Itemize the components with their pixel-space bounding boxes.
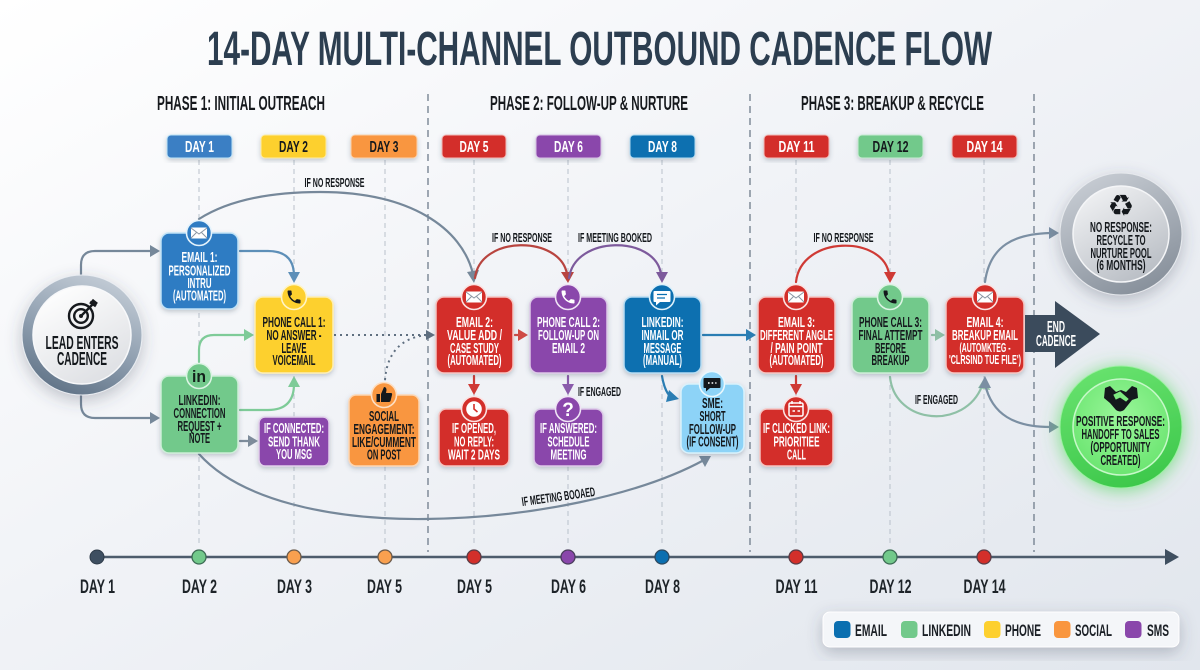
panel: email 2: EMAIL 2: bbox=[456, 315, 493, 331]
icon: phone bbox=[878, 284, 902, 310]
arrow: email 2 to phone call 2 bbox=[515, 329, 528, 341]
panel: email 1: (AUTOMATED) bbox=[173, 288, 226, 304]
arrow: red arc email 2 to phone call 2 bbox=[475, 245, 574, 283]
panel: linkedin inmail: (MANUAL) bbox=[643, 353, 682, 369]
panel: social engagement bbox=[349, 382, 419, 466]
panel: if connected: IF CONNECTED: bbox=[264, 421, 324, 437]
panel: email 4: EMAIL 4: bbox=[966, 315, 1004, 331]
timeline marker: day 8 bbox=[645, 550, 680, 598]
day badge: day 8 bbox=[630, 135, 695, 158]
arrow: purple arc phone call 2 to linkedin bbox=[569, 245, 668, 283]
timeline marker: day 3: DAY 3 bbox=[277, 577, 312, 598]
panel: email 4: BREAKUP EMAIL bbox=[952, 328, 1018, 344]
panel: email 2: (AUTOMATED) bbox=[448, 353, 502, 369]
arrow: social engagement dotted bbox=[385, 335, 428, 380]
panel: phone call 2 bbox=[530, 284, 607, 373]
arrow: red arc email 3 to phone call 3 bbox=[796, 246, 896, 283]
panel: if answered: IF ANSWERED: bbox=[540, 421, 597, 437]
panel: email 3: EMAIL 3: bbox=[778, 315, 815, 331]
panel: email 3 bbox=[758, 284, 835, 373]
panel: linkedin inmail: MESSAGE bbox=[644, 341, 682, 357]
panel: if clicked link bbox=[760, 396, 833, 466]
panel: linkedin connection bbox=[161, 364, 238, 453]
timeline marker: day 6: DAY 6 bbox=[551, 577, 586, 598]
panel: social engagement: ENGAGEMENT: bbox=[354, 422, 414, 438]
lead enters cadence circle: CADENCE bbox=[57, 348, 107, 369]
panel: if answered: SCHEDULE bbox=[548, 434, 590, 450]
timeline marker: day 11: DAY 11 bbox=[776, 577, 818, 598]
panel: if connected: YOU MSG bbox=[276, 447, 312, 463]
circle: no response recycle: NO RESPONSE: bbox=[1090, 220, 1152, 236]
day badge: day 1: DAY 1 bbox=[185, 139, 214, 156]
panel: if clicked link: CALL bbox=[787, 448, 806, 464]
icon: clock bbox=[462, 396, 486, 422]
panel: if opened: WAIT 2 DAYS bbox=[448, 448, 500, 464]
panel: linkedin connection: CONNECTION bbox=[174, 406, 226, 422]
timeline marker: day 5: DAY 5 bbox=[367, 577, 402, 598]
arrow: green arc phone call 3 to email 4 bbox=[890, 377, 990, 416]
panel: email 2: VALUE ADD / bbox=[447, 328, 502, 344]
panel: phone call 1: LEAVE bbox=[282, 341, 307, 357]
arrow: phone call 2 down bbox=[562, 376, 574, 395]
legend item: social: SOCIAL bbox=[1075, 621, 1112, 640]
icon: linkedin: in bbox=[192, 367, 206, 386]
arrow: end cadence bbox=[1025, 301, 1100, 368]
panel: linkedin connection: NOTE bbox=[189, 431, 210, 447]
arrow: email 2 down bbox=[468, 376, 480, 395]
arrow: linkedin to email 3 bbox=[703, 329, 756, 341]
panel: email 4: (AUTOMKTEG - bbox=[960, 341, 1010, 355]
legend bbox=[823, 612, 1179, 647]
legend item: email: EMAIL bbox=[855, 621, 887, 640]
icon: phone bbox=[556, 284, 580, 310]
panel: phone call 2: PHONE CALL 2: bbox=[537, 315, 600, 331]
timeline marker: day 1: DAY 1 bbox=[80, 577, 115, 598]
panel: sms follow-up: SME: bbox=[702, 396, 723, 412]
day badge: day 2: DAY 2 bbox=[279, 139, 308, 156]
panel: phone call 1: PHONE CALL 1: bbox=[262, 315, 326, 331]
panel: social engagement: LIKE/CUMMENT bbox=[352, 435, 416, 451]
panel: phone call 3: PHONE CALL 3: bbox=[859, 315, 922, 331]
panel: if answered: MEETING bbox=[550, 448, 586, 464]
panel: sms follow-up: FOLLOW-UP bbox=[689, 422, 736, 438]
panel: if connected bbox=[259, 417, 329, 466]
timeline marker: day 3 bbox=[277, 550, 312, 598]
arrow: email 1 to phone call 1 bbox=[240, 251, 300, 283]
circle: positive response: (OPPORTUNITY bbox=[1090, 440, 1151, 456]
label: if meeting booked rotated: IF MEETING BOOAED bbox=[521, 484, 596, 509]
circle: positive response: CREATED) bbox=[1100, 453, 1141, 469]
icon: envelope bbox=[186, 220, 212, 246]
arrow: email 3 down bbox=[790, 376, 802, 395]
panel: sms follow-up bbox=[681, 372, 744, 453]
panel: social engagement: ON POST bbox=[367, 448, 401, 464]
icon: recycle: ♻ bbox=[1108, 189, 1134, 224]
day badge: day 6 bbox=[536, 135, 601, 158]
arrow: lead to linkedin bbox=[81, 394, 160, 424]
icon: handshake bbox=[1104, 386, 1138, 412]
icon: phone bbox=[282, 284, 306, 310]
panel: linkedin connection: REQUEST + bbox=[178, 419, 222, 435]
timeline marker: day 2: DAY 2 bbox=[182, 577, 217, 598]
panel: email 2 bbox=[436, 284, 513, 373]
arrow: phone call 1 to email 2 dotted bbox=[334, 330, 435, 340]
arrow: email 4 to no response bbox=[985, 227, 1059, 282]
phase 2 heading: PHASE 2: FOLLOW-UP & NURTURE bbox=[490, 93, 688, 115]
panel: email 1: PERSONALIZED bbox=[168, 264, 230, 280]
icon: sms bubble bbox=[700, 372, 724, 396]
legend item: social bbox=[1054, 621, 1112, 640]
arrow: end cadence: CADENCE bbox=[1036, 333, 1076, 350]
panel: sms follow-up: (IF CONSENT) bbox=[686, 434, 739, 450]
icon: thumbs up bbox=[372, 382, 396, 408]
day badge: day 14 bbox=[952, 135, 1017, 158]
icon: question mark: ? bbox=[562, 400, 574, 421]
panel: social engagement: SOCIAL bbox=[369, 409, 399, 425]
panel: if answered bbox=[534, 396, 603, 466]
panel: email 4 bbox=[946, 284, 1024, 373]
arrow: phone call 3 to email 4 bbox=[932, 329, 945, 341]
panel: phone call 3 bbox=[852, 284, 929, 373]
panel: email 4: 'CLRSIND TUE FILE') bbox=[949, 353, 1021, 367]
icon: envelope bbox=[784, 284, 808, 310]
legend item: linkedin: LINKEDIN bbox=[922, 621, 971, 640]
lead enters cadence circle: LEAD ENTERS bbox=[46, 332, 118, 353]
timeline marker: day 8: DAY 8 bbox=[645, 577, 680, 598]
timeline marker: day 12: DAY 12 bbox=[870, 577, 912, 598]
timeline marker: day 6 bbox=[551, 550, 586, 598]
panel: phone call 3: BEFORE bbox=[875, 341, 906, 357]
label: if engaged middle: IF ENGAGED bbox=[578, 384, 621, 399]
legend item: phone: PHONE bbox=[1005, 621, 1041, 640]
panel: if opened bbox=[439, 396, 509, 466]
panel: email 1: EMAIL 1: bbox=[182, 250, 218, 266]
arrow: linkedin to sms bbox=[662, 376, 679, 402]
panel: if opened: IF OPENED, bbox=[452, 421, 496, 437]
arrow: email 4 to positive response bbox=[979, 376, 1059, 433]
day badge: day 5: DAY 5 bbox=[460, 139, 489, 156]
legend item: email bbox=[834, 621, 887, 640]
circle: no response recycle: (6 MONTHS) bbox=[1096, 258, 1146, 274]
timeline marker: day 2 bbox=[182, 550, 217, 598]
icon: envelope bbox=[462, 284, 486, 310]
timeline marker: day 12 bbox=[870, 550, 912, 598]
icon: chat bubble bbox=[650, 284, 674, 310]
icon: target bbox=[69, 300, 97, 328]
panel: email 3: (AUTOMATED) bbox=[770, 353, 824, 369]
arrow: lead to email 1 bbox=[81, 245, 160, 276]
panel: linkedin inmail: INMAIL OR bbox=[642, 328, 684, 344]
day badge: day 11: DAY 11 bbox=[778, 139, 815, 156]
timeline marker: day 14 bbox=[964, 550, 1006, 598]
panel: phone call 3: BREAKUP bbox=[872, 353, 910, 369]
arrow: linkedin to if connected bbox=[240, 435, 258, 447]
label: if engaged phase 3: IF ENGAGED bbox=[915, 392, 958, 407]
lead enters cadence circle bbox=[22, 275, 142, 395]
label: if no response phase 3: IF NO RESPONSE bbox=[814, 230, 874, 245]
timeline marker: day 5 second: DAY 5 bbox=[457, 577, 492, 598]
panel: phone call 1 bbox=[255, 284, 333, 373]
arrow: email 1 to email 2 long arc bbox=[199, 192, 479, 283]
day badge: day 3 bbox=[351, 135, 417, 158]
circle: no response recycle: RECYCLE TO bbox=[1096, 233, 1146, 249]
legend item: sms bbox=[1125, 621, 1169, 640]
day badge: day 2 bbox=[261, 135, 326, 158]
panel: phone call 1: VOICEMAIL bbox=[272, 353, 316, 369]
label: if meeting booked: IF MEETING BOOKED bbox=[578, 230, 652, 245]
circle: positive response bbox=[1060, 366, 1182, 488]
timeline marker: day 14: DAY 14 bbox=[964, 577, 1006, 598]
panel: if clicked link: PRIORITIEE bbox=[774, 434, 820, 450]
day badge: day 6: DAY 6 bbox=[554, 139, 583, 156]
legend item: sms: SMS bbox=[1147, 621, 1169, 640]
phase 1 heading: PHASE 1: INITIAL OUTREACH bbox=[157, 93, 325, 115]
panel: email 2: CASE STUDY bbox=[450, 341, 499, 357]
day badge: day 12 bbox=[858, 135, 923, 158]
panel: phone call 1: NO ANSWER - bbox=[266, 328, 322, 344]
panel: email 1: INTRU bbox=[188, 276, 212, 292]
day badges row bbox=[167, 135, 1017, 158]
panel: sms follow-up: SHORT bbox=[700, 409, 726, 425]
icon: envelope bbox=[972, 284, 998, 310]
day badge: day 3: DAY 3 bbox=[370, 139, 399, 156]
legend item: linkedin bbox=[901, 621, 971, 640]
panel: phone call 2: FOLLOW-UP ON bbox=[538, 328, 599, 344]
icon: calendar bbox=[784, 396, 808, 422]
panel: email 3: / PAIN POINT bbox=[770, 341, 823, 357]
arrow: linkedin to phone call 1 upper bbox=[199, 329, 254, 362]
panel: email 3: DIFFERENT ANGLE bbox=[760, 328, 833, 344]
day badge: day 1 bbox=[167, 135, 232, 158]
timeline bbox=[80, 549, 1179, 598]
panel: phone call 2: EMAIL 2 bbox=[552, 341, 585, 357]
label: if no response top: IF NO RESPONSE bbox=[304, 175, 365, 190]
panel: phone call 3: FINAL ATTEMPT bbox=[858, 328, 923, 344]
phase 3 heading: PHASE 3: BREAKUP & RECYCLE bbox=[801, 93, 984, 115]
panel: linkedin inmail bbox=[624, 284, 701, 373]
day badge: day 11 bbox=[764, 135, 829, 158]
arrow: linkedin to phone call 1 lower bbox=[240, 376, 300, 410]
panel: linkedin connection: LINKEDIN: bbox=[178, 393, 220, 409]
circle: no response recycle bbox=[1060, 173, 1182, 295]
day badge: day 8: DAY 8 bbox=[648, 139, 677, 156]
legend item: phone bbox=[984, 621, 1041, 640]
day badge: day 12: DAY 12 bbox=[872, 139, 909, 156]
day badge: day 14: DAY 14 bbox=[966, 139, 1003, 156]
timeline marker: day 5 bbox=[367, 550, 402, 598]
label: if no response middle: IF NO RESPONSE bbox=[492, 230, 552, 245]
panel: email 1 bbox=[161, 220, 238, 309]
panel: linkedin inmail: LINKEDIN: bbox=[642, 315, 684, 331]
panel: if connected: SEND THANK bbox=[268, 434, 320, 450]
arrow: end cadence: END bbox=[1047, 319, 1065, 336]
timeline marker: day 1 bbox=[80, 550, 115, 598]
timeline marker: day 5 second bbox=[457, 550, 492, 598]
panel: if opened: NO REPLY: bbox=[454, 434, 494, 450]
timeline marker: day 11 bbox=[776, 550, 818, 598]
panel: if clicked link: IF CLICKED LINK: bbox=[763, 421, 830, 437]
arrow: linkedin to sms long arc bbox=[199, 454, 711, 519]
day badge: day 5 bbox=[442, 135, 506, 158]
